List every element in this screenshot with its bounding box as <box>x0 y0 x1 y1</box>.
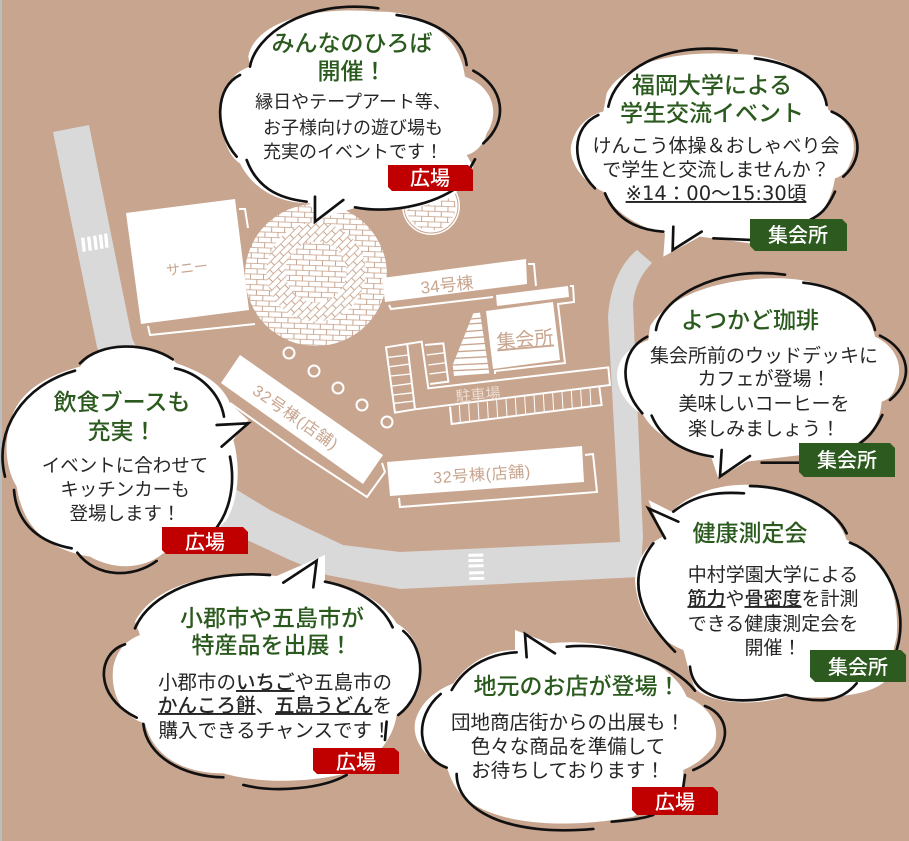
location tag: 集会所 <box>817 449 877 472</box>
bubble: 健康測定会 <box>635 485 906 702</box>
building: 集会所 <box>486 302 560 369</box>
location tag <box>313 748 399 774</box>
building: 32号棟 diagonal <box>221 355 385 497</box>
crossing: south road <box>468 555 484 579</box>
location tag <box>632 787 718 815</box>
body text: 縁日やテープアート等、 <box>255 92 451 112</box>
cloud outline <box>220 7 500 222</box>
cloud outline <box>635 485 900 702</box>
building: Sunny: サニー <box>165 258 209 278</box>
body text: 団地商店街からの出展も！ <box>451 712 685 734</box>
cloud outline <box>415 630 725 830</box>
location tag <box>810 650 906 682</box>
location tag: 集会所 <box>828 656 888 679</box>
label: parking: 駐車場 <box>455 385 501 406</box>
heading: よつかど珈琲 <box>681 307 819 333</box>
building: 34号棟: 34号棟 <box>420 273 474 298</box>
heading: 地元のお店が登場！ <box>474 673 680 699</box>
parking lot <box>386 342 610 424</box>
building: 32号棟 south: 32号棟(店舗) <box>433 463 532 487</box>
map: roads <box>53 125 652 589</box>
map: plaza with brick paving <box>245 177 460 346</box>
body text: イベントに合わせて <box>42 455 208 476</box>
heading: 小郡市や五島市が <box>180 605 364 631</box>
location tag <box>162 527 248 554</box>
building: annex strip <box>495 286 574 374</box>
body text: 色々な商品を準備して <box>471 736 665 758</box>
body text: 開催！ <box>744 637 802 659</box>
body text: できる健康測定会を <box>688 613 858 635</box>
crossing: north road <box>83 234 107 252</box>
heading: 福岡大学による <box>632 72 792 98</box>
building: 集会所: 集会所 <box>496 327 554 353</box>
heading line 2: 開催！ <box>318 58 386 84</box>
heading line 2: 特産品を出展！ <box>192 632 352 658</box>
heading: 健康測定会 <box>692 520 808 546</box>
bubble: 福岡大学 <box>571 49 857 257</box>
map: buildings <box>126 199 610 507</box>
location tag <box>799 443 895 477</box>
heading line 2: 学生交流イベント <box>620 100 804 126</box>
body text: お子様向けの遊び場も <box>263 118 443 138</box>
body text: 楽しみましょう！ <box>688 418 840 440</box>
location tag: 広場 <box>655 791 695 814</box>
building: Sunny <box>126 199 255 335</box>
body text: 美味しいコーヒーを <box>678 393 850 415</box>
diagonal brick ring <box>276 232 356 312</box>
cloud outline <box>617 273 906 478</box>
body text: カフェが登場！ <box>697 368 831 390</box>
body text: けんこう体操＆おしゃべり会 <box>592 135 840 157</box>
body text: 集会所前のウッドデッキに <box>650 345 878 367</box>
body text: 中村学園大学による <box>688 564 858 586</box>
large brick plaza <box>245 204 387 346</box>
location tag: 広場 <box>410 167 450 190</box>
body text: 充実のイベントです！ <box>263 142 443 162</box>
bubble: よつかど珈琲 <box>617 273 906 478</box>
location tag: 広場 <box>185 531 225 554</box>
location tag: 集会所 <box>768 224 828 247</box>
heading: 飲食ブースも <box>54 389 190 415</box>
bubble: 小郡市や五島市 <box>104 555 421 789</box>
time note: ※14：00～15:30頃 <box>626 182 807 205</box>
bubble: 地元のお店 <box>415 630 725 830</box>
location tag: 広場 <box>336 751 376 774</box>
cloud outline <box>571 49 857 257</box>
body text: お待ちしております！ <box>471 760 665 782</box>
body text: で学生と交流しませんか？ <box>602 159 830 181</box>
cloud outline <box>2 346 248 573</box>
small round brick plaza <box>402 177 460 235</box>
body text: 小郡市のいちごや五島市の <box>158 672 392 694</box>
bubble: みんなのひろば開催 <box>220 7 500 222</box>
location tag <box>750 219 847 251</box>
body text: 筋力や骨密度を計測 <box>687 589 859 610</box>
body text: キッチンカーも <box>60 479 190 500</box>
road network <box>53 125 652 589</box>
cloud outline <box>104 555 421 789</box>
body text: かんころ餅、五島うどんを <box>158 695 392 717</box>
stepping circles <box>284 348 392 428</box>
location tag <box>388 165 473 191</box>
building: 32号棟 south <box>387 446 597 507</box>
wood deck stripes <box>453 313 490 376</box>
heading: みんなのひろば <box>272 30 432 56</box>
building: 34号棟 <box>382 259 536 309</box>
building: 32号棟 diagonal: 32号棟(店舗) <box>249 382 342 454</box>
body text: 登場します！ <box>69 503 181 524</box>
body text: 購入できるチャンスです！ <box>158 720 392 742</box>
left edge strip <box>0 0 2 841</box>
heading line 2: 充実！ <box>88 418 156 444</box>
bubble: 飲食ブース <box>2 346 248 573</box>
